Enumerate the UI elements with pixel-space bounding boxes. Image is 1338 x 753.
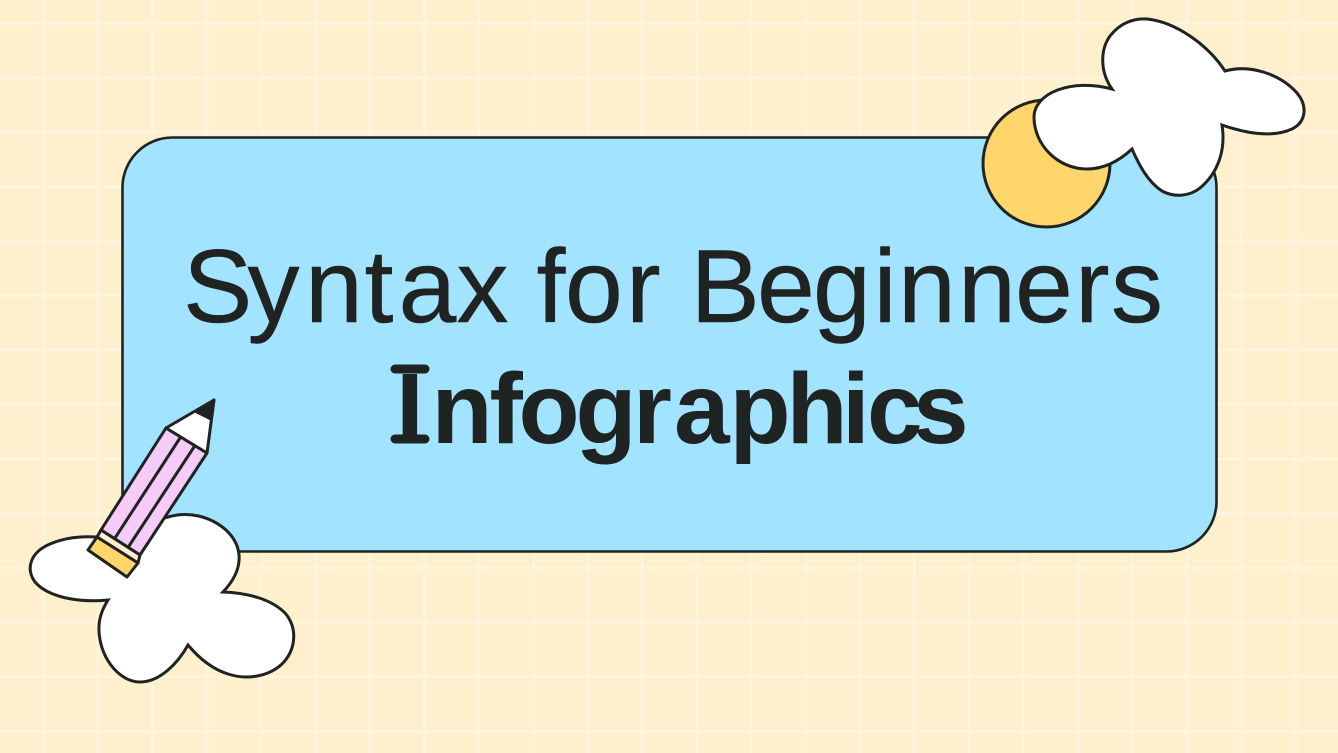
icon: pencil bbox=[88, 400, 214, 577]
title bbox=[183, 229, 1163, 465]
icon: bottom left cloud bbox=[30, 515, 294, 682]
letter I serifs bbox=[395, 369, 425, 439]
heading line: Syntax for Beginners: Syntax for Beginners bbox=[183, 229, 1163, 345]
heading line: Infographics: Infographics bbox=[396, 353, 969, 465]
icon: top right cloud bbox=[1034, 19, 1304, 195]
panel: blue title card bbox=[122, 138, 1216, 552]
icon: yellow sun circle bbox=[983, 100, 1110, 227]
